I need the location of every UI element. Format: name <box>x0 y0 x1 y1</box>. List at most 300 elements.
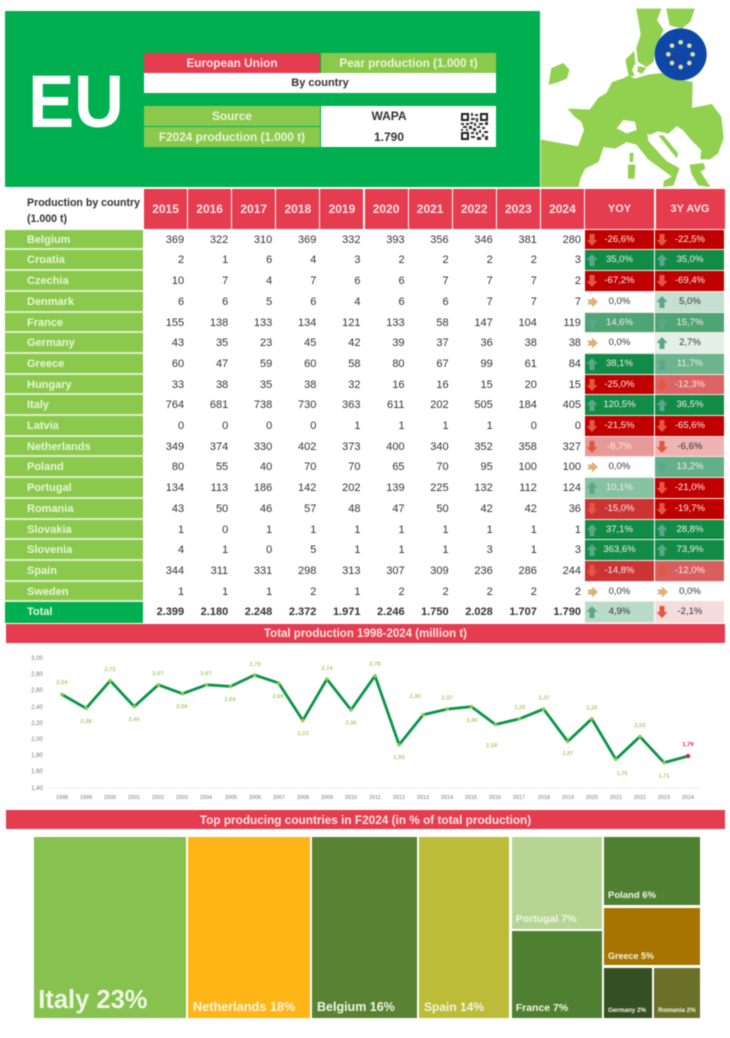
data labels: 2,40 <box>128 717 140 723</box>
row: Romania: 47 <box>392 503 405 515</box>
row: Germany <box>4 332 724 354</box>
row: Slovenia: 1 <box>354 544 360 556</box>
row: Slovakia: 1 <box>487 524 493 536</box>
production table <box>4 229 725 624</box>
row: Croatia: 1 <box>222 254 228 266</box>
row: Netherlands: -6,6% <box>678 441 702 452</box>
map of Europe with EU flag <box>540 8 724 188</box>
row: Czechia: 7 <box>443 275 449 287</box>
title: EU: EU <box>28 60 124 142</box>
row: Denmark: 6 <box>398 296 405 308</box>
tile: Spain: Spain 14% <box>424 1000 484 1014</box>
row: Romania: 42 <box>480 503 493 515</box>
row: Italy: 764 <box>166 399 184 411</box>
row: Greece: 84 <box>569 358 581 370</box>
tile: Belgium <box>312 837 417 1018</box>
row: Denmark: 6 <box>310 296 316 308</box>
x axis labels: 1998 <box>56 795 68 801</box>
row: France: 133 <box>254 317 272 329</box>
row: Hungary: 33 <box>172 379 184 391</box>
row: Portugal: 113 <box>211 482 228 494</box>
table header: years and indicators: 2019 <box>329 202 355 216</box>
row: Portugal: 112 <box>519 482 537 494</box>
row: Total: 1.750 <box>421 606 449 618</box>
row: Sweden: 0,0% <box>609 586 630 597</box>
row: Belgium: 369 <box>298 234 316 246</box>
tile: France <box>512 931 602 1018</box>
row: Netherlands <box>4 436 724 458</box>
row: Poland: 70 <box>348 461 360 473</box>
row: Belgium: 310 <box>254 234 272 246</box>
row: Slovakia: 1 <box>354 524 360 536</box>
row: Portugal: 202 <box>342 482 360 494</box>
row: Latvia: 0 <box>310 420 316 432</box>
row: Hungary: 32 <box>348 379 360 391</box>
row: Croatia: 2 <box>531 254 537 266</box>
label: Source: Source <box>212 109 252 123</box>
row: Netherlands: 330 <box>254 441 272 453</box>
tile: Netherlands <box>188 837 310 1018</box>
row: Sweden: 0,0% <box>679 586 701 597</box>
tile: Greece: Greece 5% <box>608 951 654 961</box>
x axis labels: 2007 <box>273 795 285 801</box>
row: Germany: 35 <box>216 337 228 349</box>
data labels: 2,79 <box>249 662 261 668</box>
row: Poland: 40 <box>260 461 272 473</box>
row: Greece: Greece <box>27 358 64 370</box>
table header: years and indicators: 2021 <box>417 202 443 216</box>
row: Czechia: 10 <box>172 275 184 287</box>
x axis labels: 2015 <box>465 795 477 801</box>
row: Greece: 58 <box>348 358 360 370</box>
row: Belgium: 381 <box>518 234 537 246</box>
row: Portugal: 134 <box>166 482 184 494</box>
row: Latvia: -21,5% <box>604 420 634 431</box>
icon: EU flag <box>655 28 707 80</box>
data labels: 2,36 <box>345 720 357 726</box>
row: Netherlands: 340 <box>430 441 449 453</box>
row: Belgium: 322 <box>210 234 228 246</box>
tile: Belgium: Belgium 16% <box>317 1000 395 1014</box>
row: Latvia: 0 <box>178 420 184 432</box>
data labels: 2,18 <box>486 743 498 749</box>
tile: Netherlands: Netherlands 18% <box>193 1000 295 1014</box>
row: Latvia: Latvia <box>27 420 59 432</box>
row: Denmark: 6 <box>443 296 449 308</box>
row: Slovakia: 28,8% <box>676 524 703 535</box>
row: Spain: 286 <box>518 565 537 577</box>
data markers <box>60 673 690 764</box>
row: Hungary: 38 <box>304 379 316 391</box>
row: Hungary: 15 <box>480 379 493 391</box>
row: France: France <box>27 317 63 329</box>
row: Greece: 61 <box>525 358 537 370</box>
x axis labels: 2020 <box>586 795 598 801</box>
row: Greece <box>4 353 725 376</box>
row: Croatia: 2 <box>487 254 493 266</box>
row: France: 133 <box>386 317 405 329</box>
row: Total: 2.248 <box>245 606 272 618</box>
row: Sweden: 1 <box>266 586 272 598</box>
row: Romania: -19,7% <box>675 503 705 514</box>
data labels: 1,93 <box>393 755 405 761</box>
section heading: top producing countries <box>6 810 725 829</box>
row: Netherlands: Netherlands <box>27 441 91 453</box>
row: Netherlands: 327 <box>563 441 581 453</box>
row: France: 147 <box>474 317 493 329</box>
table header: years and indicators: 2024 <box>549 202 576 216</box>
row: Slovakia: 1 <box>178 524 184 536</box>
row: Belgium: 393 <box>386 234 405 246</box>
row: Latvia: 0 <box>531 420 537 432</box>
row: Spain <box>4 560 725 582</box>
label: European Union <box>144 52 320 73</box>
row: Sweden: 1 <box>178 586 184 598</box>
row: France: 121 <box>342 317 360 329</box>
row: Sweden: 2 <box>398 586 405 598</box>
row: Total: 2.399 <box>157 606 184 618</box>
row: Portugal: 139 <box>386 482 405 494</box>
row: Italy: 505 <box>474 399 493 411</box>
row: Romania <box>4 498 725 520</box>
y axis labels: 1,80 <box>31 753 43 759</box>
row: Spain: 298 <box>298 565 316 577</box>
row: Netherlands: 352 <box>474 441 493 453</box>
row: Sweden: 2 <box>443 586 449 598</box>
row: Denmark <box>4 291 724 314</box>
row: Romania: 46 <box>260 503 272 515</box>
row: Spain: Spain <box>27 565 57 577</box>
row: France: 138 <box>210 317 228 329</box>
row: Spain: -14,8% <box>604 565 634 576</box>
tile: Greece <box>604 908 700 965</box>
row: Italy: 730 <box>298 399 316 411</box>
row: Latvia: 1 <box>398 420 405 432</box>
x axis labels: 2013 <box>417 795 429 801</box>
row: Romania: -15,0% <box>604 503 634 514</box>
y axis labels: 2,80 <box>31 672 43 678</box>
row: Slovakia <box>4 519 725 540</box>
row: Germany: 23 <box>260 337 272 349</box>
row: Total: 1.707 <box>509 606 537 618</box>
row: Slovenia: 1 <box>222 544 228 556</box>
row: Czechia: 7 <box>222 275 228 287</box>
row: Croatia: 35,0% <box>606 254 633 265</box>
data labels: 2,72 <box>104 667 116 673</box>
row: Denmark: 7 <box>575 296 581 308</box>
row: Italy: Italy <box>27 399 49 411</box>
row: Czechia: Czechia <box>27 275 69 287</box>
row: Croatia: 2 <box>443 254 449 266</box>
data labels: 1,79 <box>682 742 694 748</box>
row: Latvia <box>4 415 725 438</box>
row: Croatia: 3 <box>354 254 360 266</box>
row: Czechia: -67,2% <box>604 275 634 286</box>
table header: label: Production by country (1.000 t) <box>27 197 140 225</box>
label: Pear production <box>321 52 496 73</box>
row: Slovenia <box>4 539 725 562</box>
row: Belgium: 356 <box>430 234 449 246</box>
data labels: 1,97 <box>562 751 574 757</box>
row: Italy: 738 <box>254 399 272 411</box>
row: Denmark: 4 <box>354 296 360 308</box>
row: Germany: 38 <box>569 337 581 349</box>
row: Poland: 13,2% <box>676 461 703 472</box>
row: Hungary: -25,0% <box>604 379 634 390</box>
label: By country <box>144 73 496 93</box>
row: Slovakia: 1 <box>398 524 405 536</box>
x axis labels: 2017 <box>513 795 525 801</box>
row: Croatia: 35,0% <box>676 254 703 265</box>
source value panel <box>321 106 496 147</box>
x axis labels: 2001 <box>128 795 140 801</box>
row: Italy: 611 <box>387 399 405 411</box>
tile: Portugal: Portugal 7% <box>516 913 576 925</box>
table header: years and indicators: 2023 <box>505 202 532 216</box>
row: Czechia: 4 <box>266 275 272 287</box>
row: Greece: 59 <box>260 358 272 370</box>
row: Poland: 55 <box>216 461 228 473</box>
row: Hungary: Hungary <box>27 379 72 391</box>
row: Germany: 2,7% <box>679 337 701 348</box>
row: Hungary: 35 <box>260 379 272 391</box>
label: By country: By country <box>291 77 349 89</box>
x axis labels: 2003 <box>176 795 188 801</box>
row: Latvia: -65,6% <box>675 420 705 431</box>
row: Belgium: Belgium <box>27 234 70 246</box>
row: Czechia: 2 <box>575 275 581 287</box>
row: France <box>4 312 725 334</box>
tile: Italy <box>34 837 186 1018</box>
row: Spain: 309 <box>430 565 449 577</box>
row: Greece: 60 <box>304 358 316 370</box>
table header: years and indicators: 2020 <box>373 202 399 216</box>
tile: Poland: Poland 6% <box>608 890 656 901</box>
row: Germany: 38 <box>525 337 537 349</box>
row: Slovakia: 1 <box>531 524 537 536</box>
tile: Germany: Germany 2% <box>608 1007 646 1014</box>
x axis labels: 2010 <box>345 795 357 801</box>
row: Belgium: 346 <box>474 234 493 246</box>
row: Belgium: 280 <box>563 234 581 246</box>
table header: years and indicators <box>143 188 726 230</box>
x axis labels: 2004 <box>200 795 212 801</box>
x axis labels: 2022 <box>634 795 646 801</box>
label: European Union: European Union <box>186 56 278 70</box>
row: Netherlands: -8,7% <box>607 441 632 452</box>
row: Hungary: -12,3% <box>675 379 705 390</box>
row: Italy: 36,5% <box>676 399 703 410</box>
x axis labels: 2002 <box>152 795 164 801</box>
x axis labels: 2016 <box>489 795 501 801</box>
row: Hungary: 16 <box>436 379 449 391</box>
row: Total: 4,9% <box>609 606 630 617</box>
row: Czechia: 7 <box>487 275 493 287</box>
row: Slovenia: 4 <box>178 544 184 556</box>
row: Total: 2.246 <box>377 606 405 618</box>
row: Slovenia: 1 <box>398 544 405 556</box>
row: Germany: Germany <box>27 337 75 349</box>
row: Slovenia: 5 <box>310 544 316 556</box>
row: Total: 2.028 <box>465 606 493 618</box>
row: Netherlands: 358 <box>518 441 537 453</box>
row: Germany: 45 <box>304 337 316 349</box>
row: Hungary: 15 <box>569 379 581 391</box>
row: Latvia: 0 <box>222 420 228 432</box>
row: Denmark: 5,0% <box>679 296 701 307</box>
data labels: 2,37 <box>441 696 453 702</box>
row: Italy: 120,5% <box>603 399 636 410</box>
row: Hungary <box>4 374 725 396</box>
row: Sweden: 2 <box>310 586 316 598</box>
row: Italy: 184 <box>518 399 537 411</box>
value: 1.790 <box>321 127 457 147</box>
row: Romania: 43 <box>172 503 184 515</box>
row: Hungary: 20 <box>525 379 537 391</box>
row: Denmark: 0,0% <box>609 296 630 307</box>
row: Total <box>4 601 724 624</box>
data labels: 2,67 <box>200 671 212 677</box>
row: Slovenia: 3 <box>487 544 493 556</box>
row: Latvia: 1 <box>487 420 493 432</box>
row: Italy: 363 <box>342 399 360 411</box>
row: Germany: 43 <box>172 337 184 349</box>
row: Croatia: 4 <box>310 254 316 266</box>
row: Sweden: 2 <box>531 586 537 598</box>
tile: Germany <box>604 968 652 1018</box>
row: Poland: 0,0% <box>609 461 630 472</box>
row: Belgium: -26,6% <box>604 234 634 245</box>
x axis labels: 2009 <box>321 795 333 801</box>
row: Croatia: Croatia <box>27 254 65 266</box>
y axis labels: 2,40 <box>31 705 43 711</box>
row: Poland: 70 <box>304 461 316 473</box>
row: Czechia: -69,4% <box>675 275 705 286</box>
row: Slovakia: 37,1% <box>606 524 633 535</box>
row: Croatia: 2 <box>178 254 184 266</box>
data labels: 2,25 <box>586 706 598 712</box>
table header: years and indicators: 2018 <box>284 202 311 216</box>
row: Belgium <box>4 229 725 250</box>
row: Romania: 48 <box>348 503 360 515</box>
row: Greece: 99 <box>480 358 493 370</box>
y axis labels: 3,00 <box>31 656 43 662</box>
row: Portugal: 186 <box>254 482 272 494</box>
y axis labels: 1,40 <box>31 786 43 792</box>
row: Sweden: Sweden <box>27 586 69 598</box>
row: Spain: 244 <box>563 565 581 577</box>
row: Belgium: 332 <box>342 234 360 246</box>
row: France: 104 <box>518 317 537 329</box>
row: Poland: 95 <box>480 461 493 473</box>
row: Spain: 307 <box>386 565 405 577</box>
row: Sweden: 2 <box>575 586 581 598</box>
row: Czechia: 7 <box>310 275 316 287</box>
y axis labels: 2,00 <box>31 737 43 743</box>
row: Germany: 0,0% <box>609 337 630 348</box>
row: Latvia: 0 <box>575 420 581 432</box>
x axis labels: 2023 <box>658 795 670 801</box>
row: Portugal: 10,1% <box>606 482 633 493</box>
row: Slovenia: 73,9% <box>676 544 703 555</box>
x axis labels: 2008 <box>297 795 309 801</box>
x axis labels: 2012 <box>393 795 405 801</box>
row: Sweden: 1 <box>354 586 360 598</box>
row: Total: -2,1% <box>678 606 702 617</box>
table header: years and indicators: YOY <box>608 203 631 215</box>
value: WAPA <box>321 106 457 126</box>
row: Spain: 236 <box>474 565 493 577</box>
data labels: 2,38 <box>80 719 92 725</box>
data labels: 2,74 <box>321 666 333 672</box>
table header: years and indicators: 2016 <box>196 202 223 216</box>
row: Spain: 311 <box>211 565 228 577</box>
icon: QR code <box>460 112 489 141</box>
row: Netherlands: 349 <box>166 441 184 453</box>
data line <box>62 675 688 763</box>
row: Denmark: 7 <box>531 296 537 308</box>
x axis labels: 2000 <box>104 795 116 801</box>
row: Croatia: 6 <box>266 254 272 266</box>
row: Hungary: 38 <box>216 379 228 391</box>
data labels: 2,25 <box>514 705 526 711</box>
row: Belgium: -22,5% <box>675 234 705 245</box>
row: Denmark: Denmark <box>27 296 74 308</box>
row: Croatia: 2 <box>398 254 405 266</box>
row: Romania: 50 <box>216 503 228 515</box>
row: Poland <box>4 456 725 478</box>
tile: France: France 7% <box>516 1002 568 1014</box>
y axis labels <box>31 656 43 792</box>
row: Greece: 38,1% <box>606 358 633 369</box>
row: Croatia <box>4 249 725 272</box>
x axis labels: 2021 <box>610 795 622 801</box>
row: France: 155 <box>166 317 184 329</box>
section heading: top producing countries: Top producing countries in F2024 (in % of total production) <box>200 812 531 826</box>
data labels: 2,40 <box>466 718 478 724</box>
row: Latvia: 1 <box>443 420 449 432</box>
row: Sweden <box>4 581 724 602</box>
row: Croatia: 3 <box>575 254 581 266</box>
row: Italy: 202 <box>430 399 449 411</box>
row: Portugal: -21,0% <box>675 482 705 493</box>
row: Sweden: 1 <box>222 586 228 598</box>
row: Latvia: 1 <box>354 420 360 432</box>
row: Greece: 60 <box>172 358 184 370</box>
data labels: 2,30 <box>409 694 421 700</box>
data labels: 2,03 <box>634 723 646 729</box>
row: Romania: 36 <box>569 503 581 515</box>
data labels: 2,69 <box>272 694 284 700</box>
row: France: 15,7% <box>676 317 703 328</box>
y axis labels: 2,60 <box>31 688 43 694</box>
row: Netherlands: 400 <box>386 441 405 453</box>
row: Portugal: 142 <box>298 482 316 494</box>
row: Slovenia: 0 <box>266 544 272 556</box>
value: 1.790: 1.790 <box>374 130 404 144</box>
row: Romania: Romania <box>27 503 73 515</box>
data labels: 2,67 <box>152 671 164 677</box>
row: Total: Total <box>27 606 52 618</box>
row: Slovakia: 1 <box>575 524 581 536</box>
row: Total: 1.971 <box>333 606 360 618</box>
row: Czechia: 6 <box>354 275 360 287</box>
value: WAPA: WAPA <box>371 109 407 123</box>
x axis labels: 2006 <box>249 795 261 801</box>
tile: Romania <box>654 968 700 1018</box>
table header: years and indicators: 2015 <box>152 202 179 216</box>
row: Italy: 681 <box>210 399 228 411</box>
